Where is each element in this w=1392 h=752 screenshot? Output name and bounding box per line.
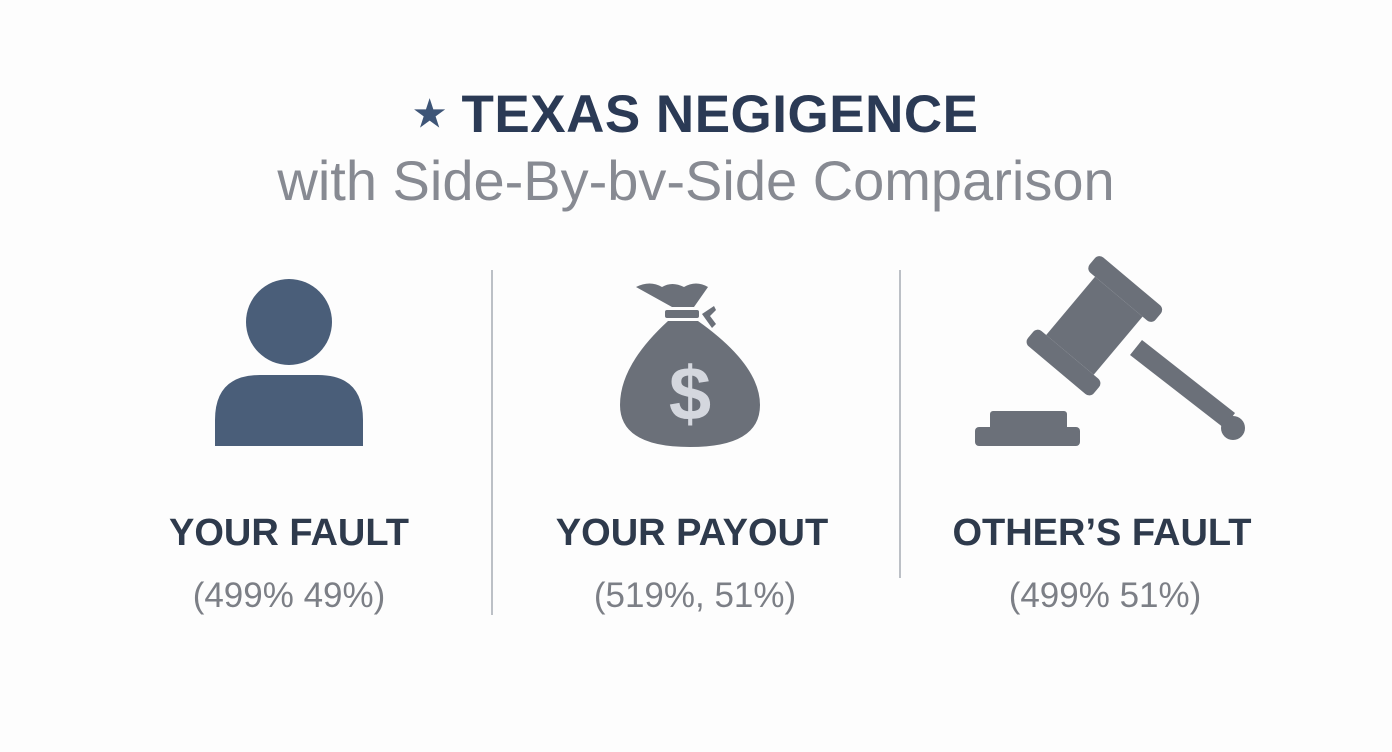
- divider 2: [899, 270, 901, 578]
- value: your fault: (499% 49%): [193, 576, 385, 615]
- divider 1: [491, 270, 493, 615]
- label: your fault: YOUR FAULT: [169, 512, 409, 554]
- label: your payout: YOUR PAYOUT: [556, 512, 828, 554]
- icon: money bag: [620, 284, 760, 447]
- value: your payout: (519%, 51%): [594, 576, 796, 615]
- subtitle: with Side-By-bv-Side Comparison: [277, 149, 1115, 212]
- icon: money bag: $: [669, 352, 711, 437]
- value: other's fault: (499% 51%): [1009, 576, 1201, 615]
- icon: gavel: [975, 256, 1245, 446]
- icon: person: [215, 279, 363, 446]
- title: ★ TEXAS NEGIGENCE: [414, 85, 978, 144]
- label: other's fault: OTHER’S FAULT: [952, 512, 1252, 554]
